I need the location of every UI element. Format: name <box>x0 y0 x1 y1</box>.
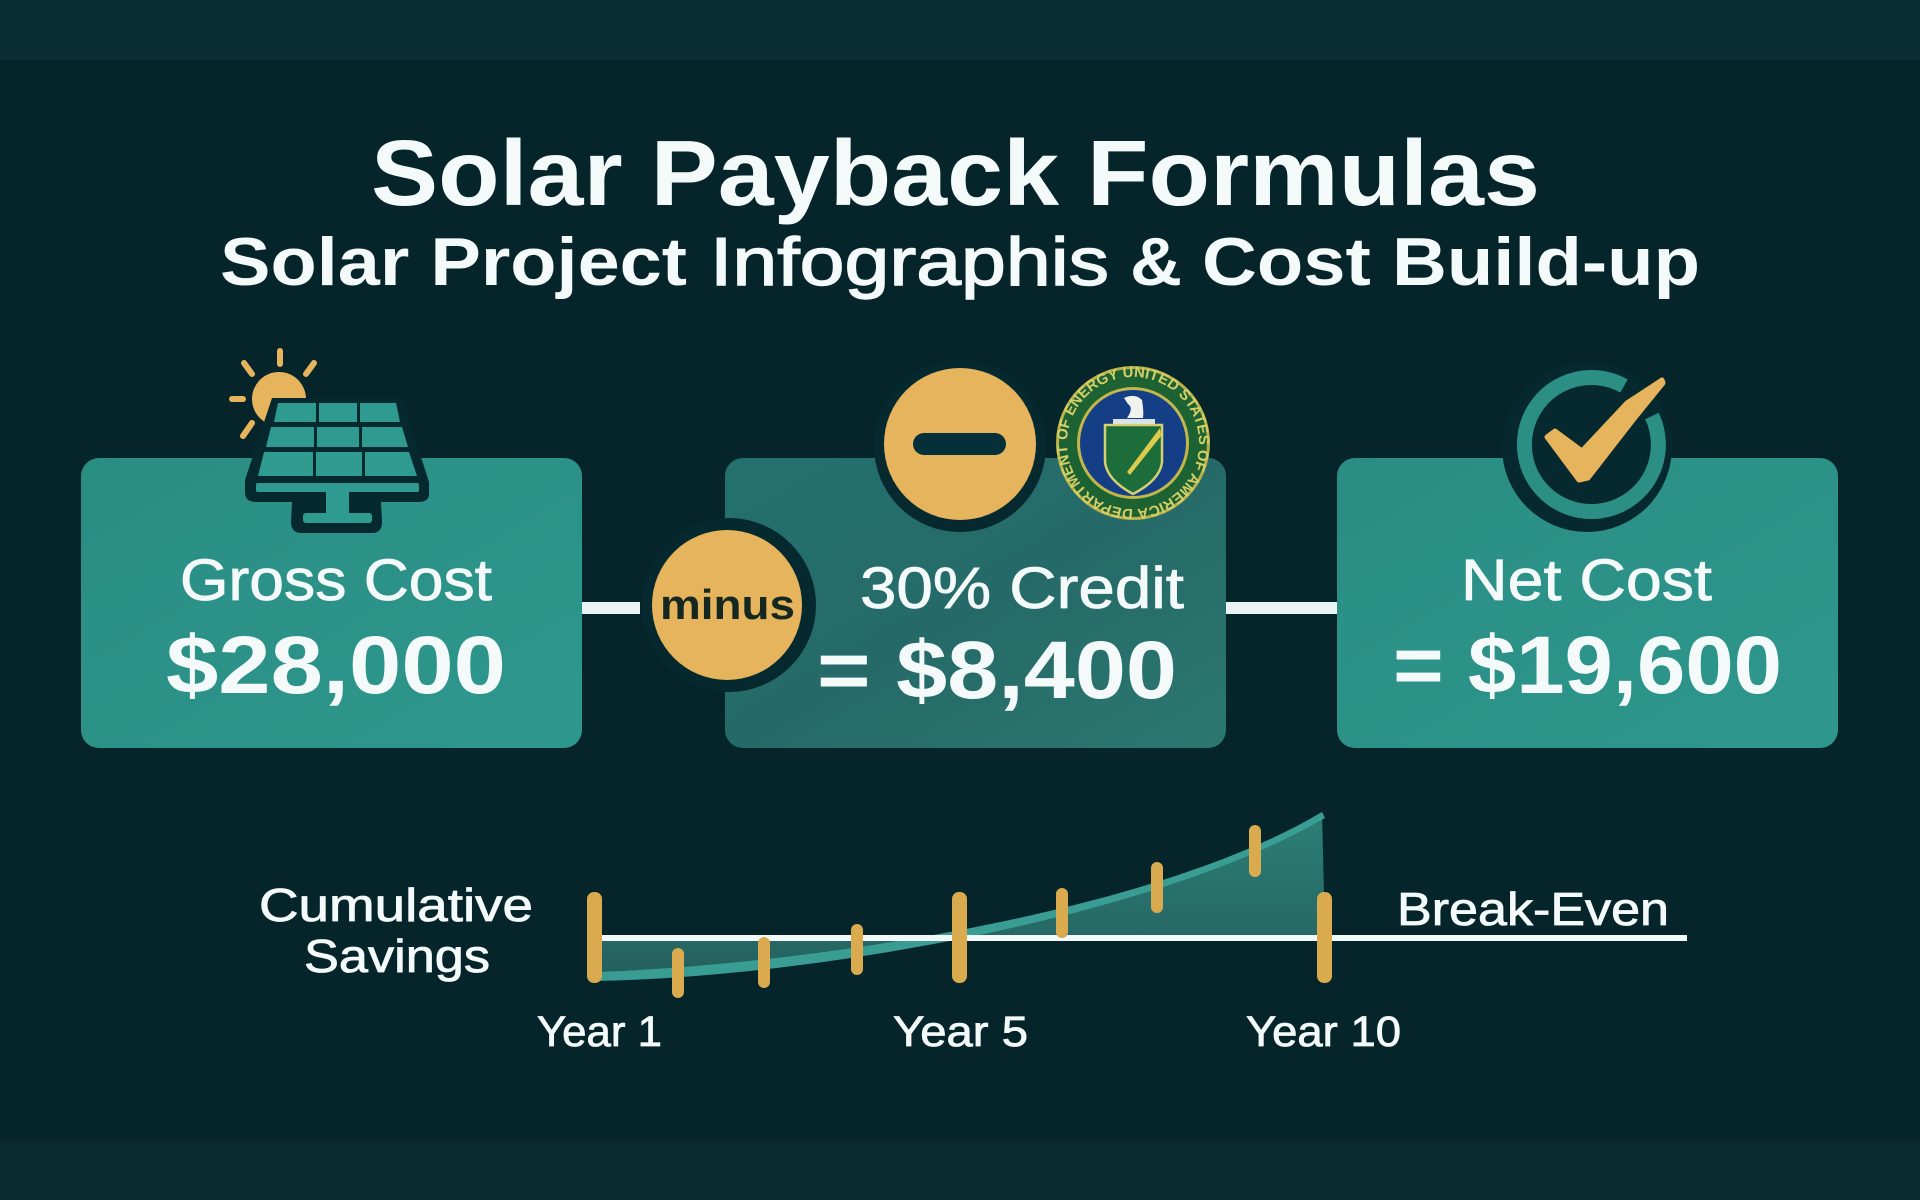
seal eagle <box>1124 396 1143 418</box>
panel: credit <box>725 458 1226 748</box>
chart: cumulative savings curve <box>587 812 1687 998</box>
subtitle <box>220 224 1700 300</box>
bottom band <box>0 1141 1920 1200</box>
net cost label: Net Cost <box>1461 548 1712 613</box>
minus badge: minus <box>660 581 795 628</box>
connector: gross to credit <box>582 602 640 614</box>
label: year 5: Year 5 <box>893 1008 1028 1056</box>
gross cost label: Gross Cost <box>180 548 492 613</box>
label: year 10: Year 10 <box>1246 1008 1401 1056</box>
seal shield <box>1105 425 1162 494</box>
subtitle: Infographis <box>710 224 1109 300</box>
minus badge <box>642 518 816 692</box>
icon: check circle <box>1502 362 1672 532</box>
subtitle: Cost Build-up <box>1202 224 1700 300</box>
title: Solar Payback Formulas <box>371 121 1540 225</box>
label: year 1: Year 1 <box>537 1008 662 1056</box>
icon: seal: DEPARTMENT OF ENERGY UNITED STATES OF AMERICA <box>1056 366 1210 520</box>
seal lightning <box>1127 428 1161 475</box>
subtitle: Solar Project <box>220 224 687 300</box>
connector: credit to net <box>1226 602 1337 614</box>
credit label: 30% Credit <box>860 556 1184 621</box>
icon: sun and solar panel <box>232 351 429 533</box>
panel: net cost <box>1337 458 1838 748</box>
label: cumulative savings: Cumulative <box>259 879 533 931</box>
net cost value: = $19,600 <box>1393 620 1782 711</box>
gross cost value: $28,000 <box>166 620 506 711</box>
label: cumulative savings: Savings <box>304 930 490 982</box>
panel: gross cost <box>81 458 582 748</box>
subtitle: & <box>1130 224 1182 300</box>
credit value: = $8,400 <box>817 625 1177 716</box>
label: cumulative savings <box>259 879 533 982</box>
top band <box>0 0 1920 60</box>
label: break-even: Break-Even <box>1397 883 1669 935</box>
icon: minus circle <box>874 360 1046 532</box>
